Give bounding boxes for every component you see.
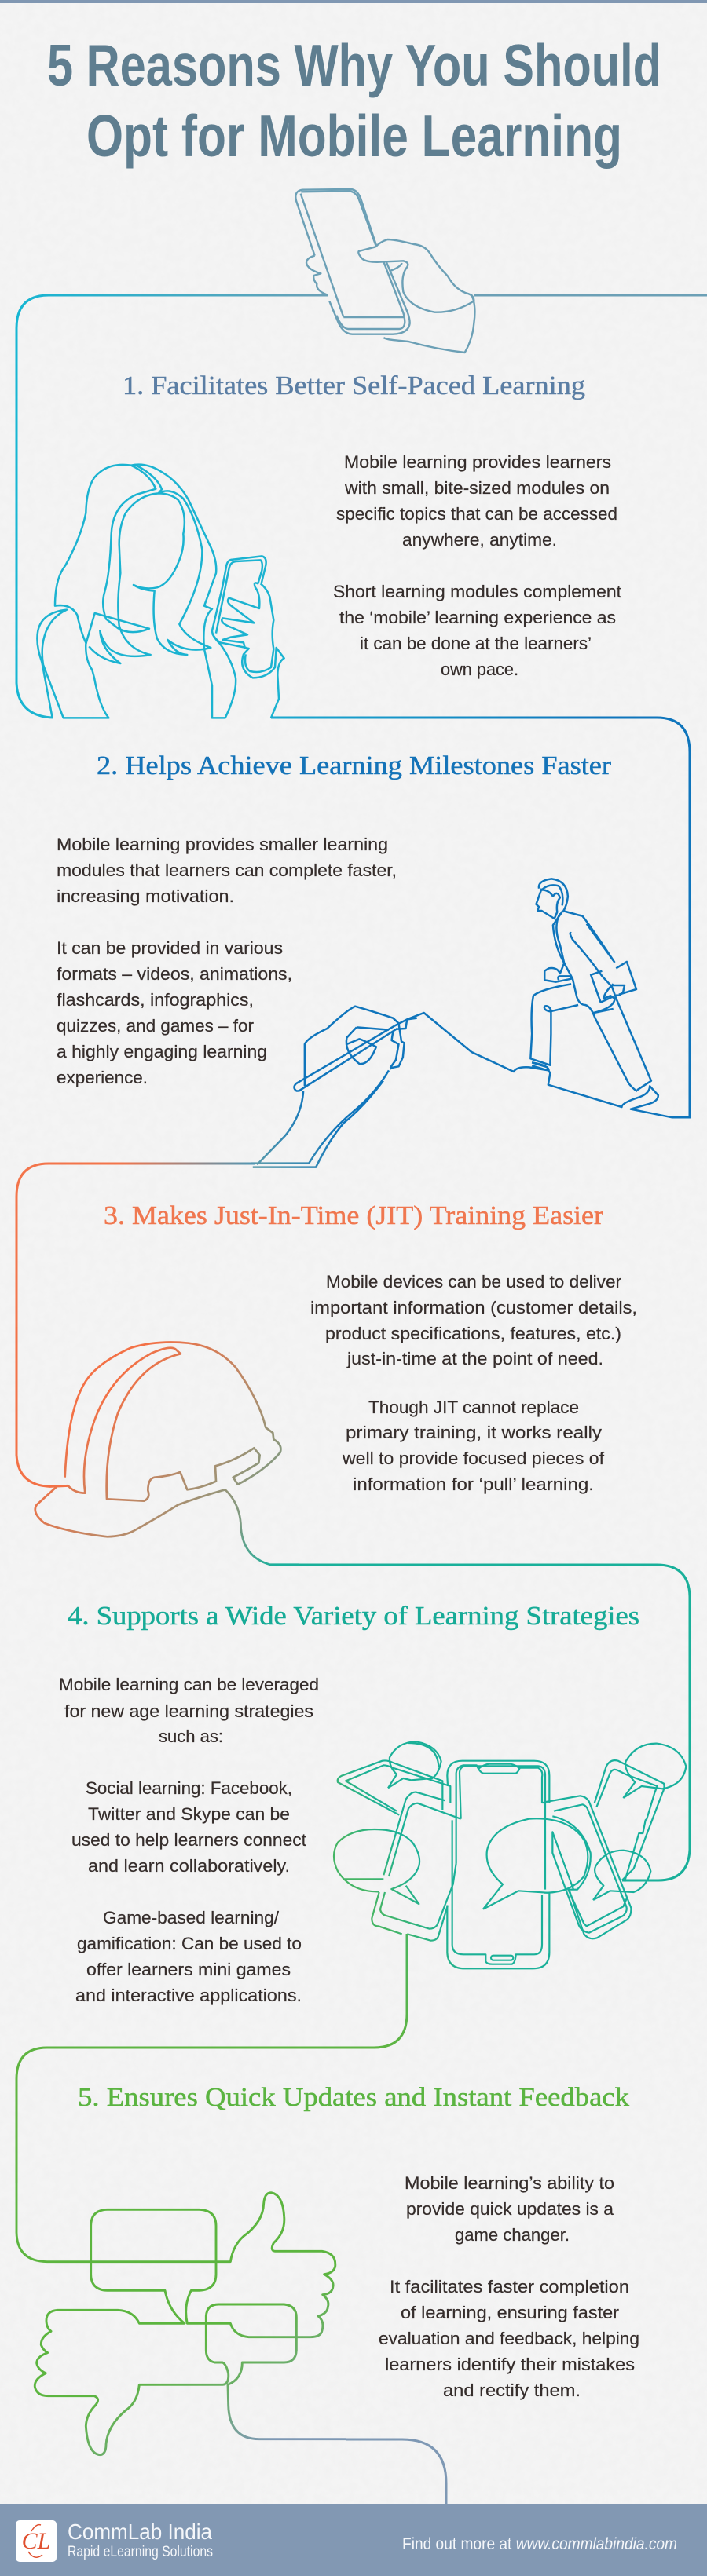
text block 2: experience.: [57, 1068, 148, 1087]
brand tagline: Rapid eLearning Solutions: [68, 2544, 213, 2560]
text block 2: flashcards, infographics,: [57, 990, 254, 1010]
text block 4: and learn collaboratively.: [88, 1856, 290, 1876]
text block 4: [59, 1675, 319, 2005]
text block 1: specific topics that can be accessed: [336, 504, 617, 524]
text block 1: anywhere, anytime.: [402, 530, 557, 550]
text block 4: offer learners mini games: [86, 1960, 291, 1979]
icon: hand drawing path and climbing man: [251, 879, 672, 1167]
heading 2: 2. Helps Achieve Learning Milestones Faster: [97, 751, 612, 780]
text block 3: information for ‘pull’ learning.: [353, 1474, 594, 1494]
text block 4: used to help learners connect: [71, 1830, 307, 1850]
text block 4: such as:: [159, 1726, 223, 1746]
text block 3: Mobile devices can be used to deliver: [326, 1272, 622, 1292]
icon: hand holding phone: [295, 189, 474, 353]
text block 5: Mobile learning’s ability to: [405, 2173, 614, 2193]
text block 5: learners identify their mistakes: [385, 2355, 635, 2374]
text block 5: provide quick updates is a: [406, 2199, 614, 2219]
icon: hard hat: [16, 1327, 299, 1565]
text block 2: [57, 835, 397, 1087]
connector: frame 4: [299, 1565, 690, 1880]
text block 3: Though JIT cannot replace: [368, 1398, 579, 1417]
top bar: [0, 0, 707, 3]
website call to action: Find out more at www.commlabindia.com: [402, 2535, 677, 2553]
icon: thumbs up, thumbs down and speech bubbles: [16, 2183, 346, 2455]
text block 1: own pace.: [441, 660, 518, 679]
heading 3: 3. Makes Just-In-Time (JIT) Training Easier: [104, 1201, 604, 1230]
text block 4: gamification: Can be used to: [77, 1934, 302, 1953]
logo: [16, 2520, 57, 2562]
text block 2: modules that learners can complete faster,: [57, 860, 397, 880]
icon: phones and chat bubbles: [334, 1741, 686, 1968]
heading 1: 1. Facilitates Better Self-Paced Learning: [123, 371, 585, 400]
text block 3: important information (customer details,: [310, 1298, 637, 1317]
text block 1: Short learning modules complement: [333, 582, 622, 601]
connector: frame 3: [16, 1164, 255, 1327]
text block 2: Mobile learning provides smaller learning: [57, 835, 388, 854]
text block 4: Social learning: Facebook,: [86, 1778, 292, 1798]
text block 5: evaluation and feedback, helping: [379, 2329, 639, 2348]
text block 1: [333, 452, 622, 679]
text block 5: game changer.: [455, 2225, 570, 2245]
text block 3: just-in-time at the point of need.: [346, 1349, 603, 1368]
connector: frame 5: [16, 1934, 407, 2183]
text block 3: product specifications, features, etc.): [325, 1324, 621, 1343]
text block 3: [310, 1272, 637, 1494]
text block 5: of learning, ensuring faster: [401, 2303, 620, 2322]
brand name: CommLab India: [68, 2519, 212, 2544]
title: [47, 32, 661, 169]
text block 5: [379, 2173, 639, 2400]
footer: [0, 2504, 707, 2576]
text block 4: Game-based learning/: [103, 1908, 280, 1927]
text block 2: formats – videos, animations,: [57, 964, 292, 984]
heading 4: 4. Supports a Wide Variety of Learning Strategies: [68, 1602, 639, 1631]
text block 1: with small, bite-sized modules on: [344, 478, 610, 498]
text block 2: increasing motivation.: [57, 886, 234, 906]
text block 4: Mobile learning can be leveraged: [59, 1675, 319, 1694]
heading 5: 5. Ensures Quick Updates and Instant Feedback: [78, 2083, 629, 2112]
connector: to footer: [346, 2439, 446, 2504]
text block 5: and rectify them.: [443, 2381, 581, 2400]
text block 4: and interactive applications.: [75, 1986, 302, 2005]
text block 4: for new age learning strategies: [64, 1701, 313, 1721]
text block 4: Twitter and Skype can be: [88, 1804, 290, 1824]
logo: CL: [22, 2528, 50, 2554]
connector: frame 1: [16, 295, 707, 718]
text block 1: Mobile learning provides learners: [344, 452, 611, 472]
text block 3: well to provide focused pieces of: [342, 1449, 605, 1468]
connector: frame 2: [271, 718, 690, 1117]
text block 1: the ‘mobile’ learning experience as: [339, 608, 616, 627]
text block 2: It can be provided in various: [57, 938, 283, 958]
icon: woman with phone: [37, 465, 284, 718]
text block 2: a highly engaging learning: [57, 1042, 267, 1061]
text block 5: It facilitates faster completion: [390, 2277, 629, 2296]
text block 3: primary training, it works really: [346, 1423, 603, 1442]
text block 1: it can be done at the learners’: [360, 634, 592, 653]
text block 2: quizzes, and games – for: [57, 1016, 255, 1036]
